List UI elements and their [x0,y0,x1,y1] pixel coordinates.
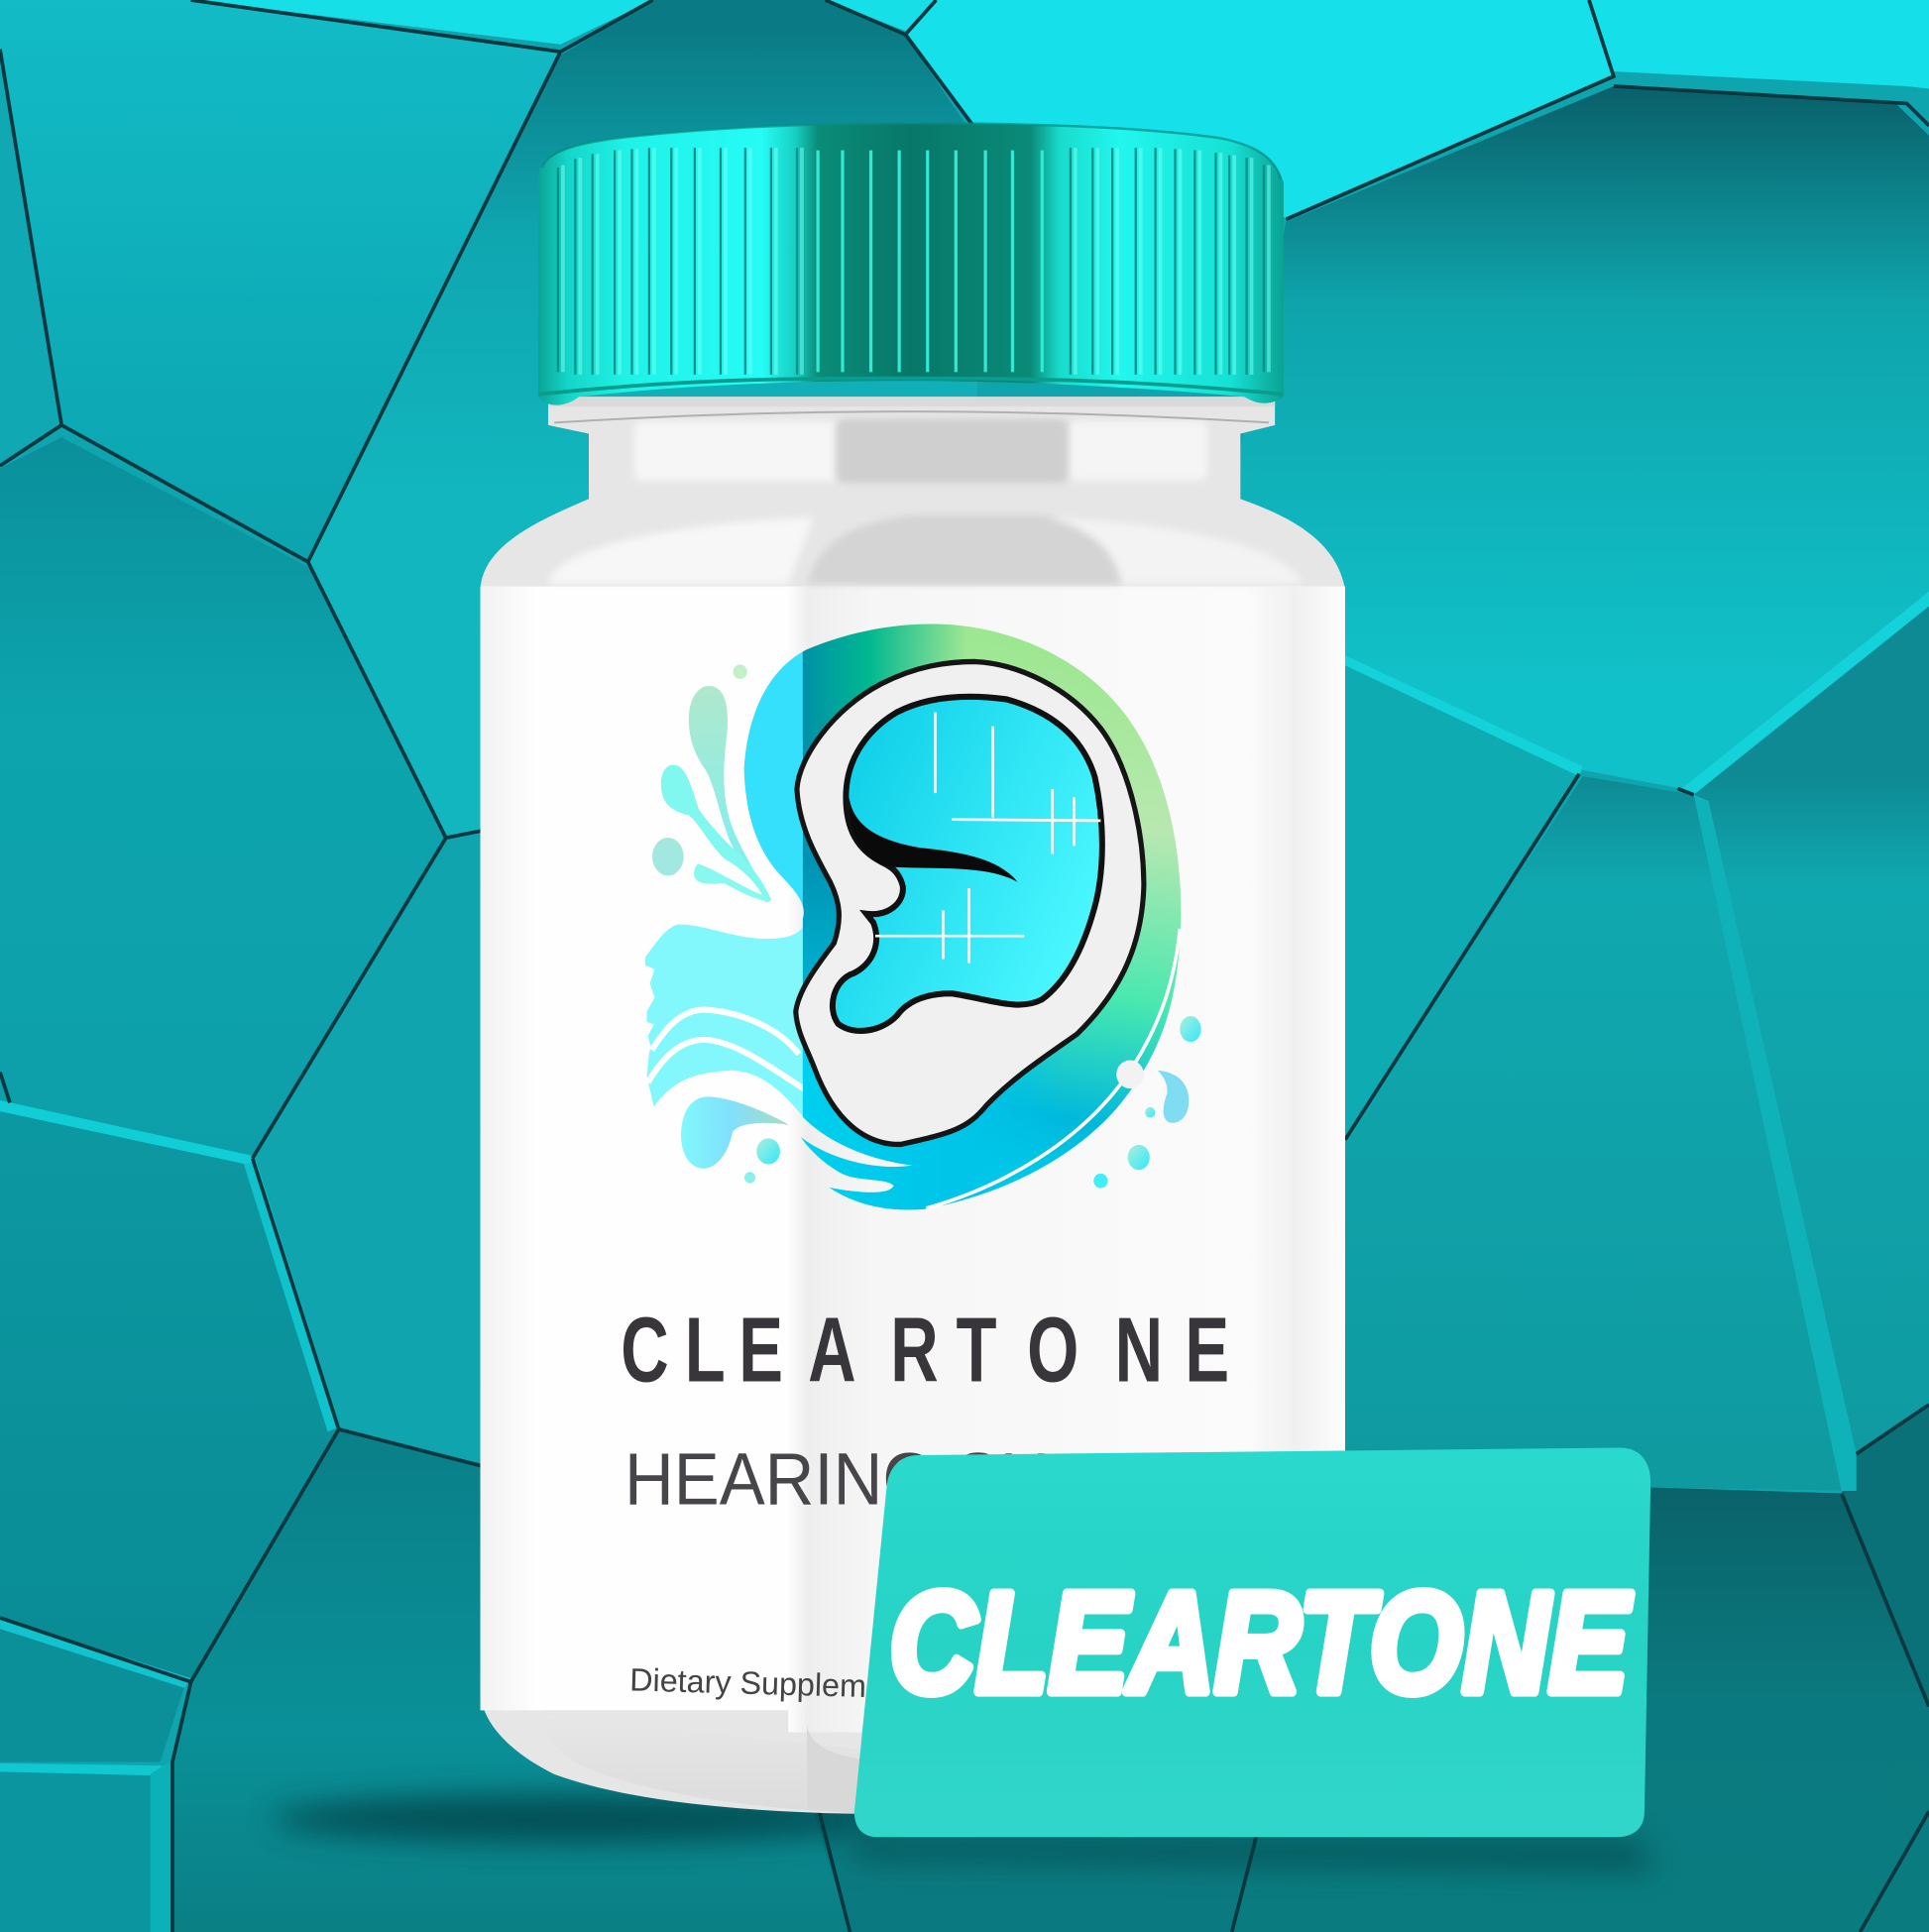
left wave [638,919,807,1121]
card brand wordmark: CLEARTONE [889,1562,1632,1723]
right splash drops [1093,1016,1201,1189]
bottle base shading [542,1700,1345,1816]
label area [481,587,1345,1733]
cap top edge [542,123,1281,179]
cap ribs on bright sides [558,148,1264,375]
left splash drops [652,664,771,902]
ground shadow under bottle [271,1794,887,1844]
card shadow [850,1836,1656,1873]
lower left splash [681,1096,789,1184]
bottle lip [548,397,1275,422]
card background [854,1448,1650,1837]
brand card [854,1448,1650,1837]
swoosh highlight line [926,929,1180,1208]
cap lower rim [538,379,1284,395]
product bottle [481,397,1345,1816]
neck highlights [634,419,1207,483]
cap ribs on dark centre [818,151,1042,372]
inner ear [833,697,1102,1031]
cap body [538,123,1284,405]
swoosh [740,620,1187,1214]
bottle body [481,397,1345,1816]
dietary supplement line: Dietary Supplement [629,1661,911,1705]
bottle product subtitle: HEARING SUPPORT [624,1438,1284,1521]
shoulder highlights [548,515,1304,584]
bottle brand name: CLEARTONE [621,1299,1229,1402]
ear outline [796,661,1144,1144]
cap rib highlights [563,148,1269,375]
bottle cap [538,123,1284,405]
ear logo [638,620,1201,1214]
